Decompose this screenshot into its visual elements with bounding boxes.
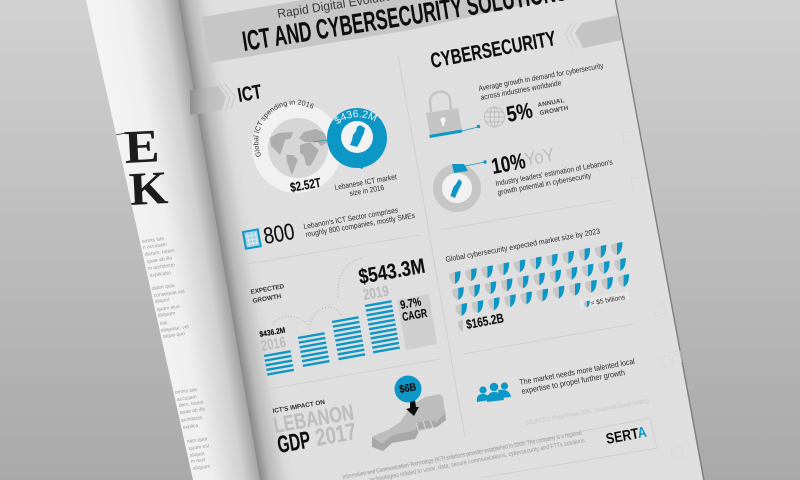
headline letters: E <box>123 120 161 173</box>
market size shields <box>445 227 630 332</box>
icon: people <box>477 382 511 402</box>
Lebanese market pin: $436.2M <box>334 110 378 124</box>
market total: $165.2B <box>465 310 505 332</box>
2016 bar: $436.2M <box>259 326 286 339</box>
headline letters <box>116 130 168 205</box>
map pin: $6B <box>398 381 417 396</box>
article text: n accusam <box>142 242 167 251</box>
article text: aliquam <box>192 464 211 472</box>
globe caption arc: Global ICT spending in 2016 <box>253 100 314 157</box>
article text: omnis iste <box>174 387 198 396</box>
market heading: Global cybersecurity expected market size by 2023 <box>445 227 601 264</box>
2018 bar <box>332 317 365 359</box>
Lebanese market caption: Lebanese ICT market <box>334 172 398 192</box>
5% stat <box>504 97 569 127</box>
article text: nisi <box>159 320 168 327</box>
10% description <box>495 157 614 197</box>
article text: m architecto <box>147 262 175 272</box>
article text: atque quo <box>162 331 186 340</box>
map: Lebanon <box>372 394 446 451</box>
footer <box>342 418 657 480</box>
10% YoY stat <box>489 145 557 179</box>
Lebanese market caption: size in 2016 <box>349 183 385 198</box>
CAGR box <box>397 294 437 350</box>
Lebanese market pin <box>327 108 387 169</box>
article text: dictum, totam <box>144 248 175 258</box>
demand text <box>478 61 604 102</box>
chart heading: EXPECTED <box>250 283 285 296</box>
GDP impact <box>272 376 446 459</box>
Lebanese market caption <box>334 172 398 198</box>
article text: explicabo. <box>149 270 173 279</box>
cybersecurity chevron marker <box>565 15 622 49</box>
talent text: The market needs more talented local <box>519 357 636 387</box>
panel: Cybersecurity <box>426 15 636 402</box>
5% stat: 5% <box>504 98 534 127</box>
2019 bar: $543.3M <box>357 255 427 289</box>
800 description: Lebanon's ICT Sector comprises <box>303 205 399 231</box>
article text: quae ab illo <box>146 255 173 265</box>
2016 bar <box>259 326 294 375</box>
800 stat: 800 <box>261 218 296 249</box>
2017 bar <box>298 333 329 366</box>
headline letters: K <box>128 162 170 216</box>
article text: architecto <box>180 415 203 424</box>
panel: ICT <box>190 81 446 459</box>
impact heading: ICT'S IMPACT ON <box>272 399 326 415</box>
page edge <box>616 0 704 480</box>
article text: consequat est <box>153 289 186 299</box>
expected growth chart <box>250 255 437 375</box>
10% YoY stat: YoY <box>523 145 557 171</box>
article text: aliquot <box>154 297 170 305</box>
article text: dem, totam <box>178 400 204 409</box>
demand text: Average growth in demand for cybersecurity <box>478 61 604 93</box>
map pin <box>394 376 422 416</box>
icon: building grid <box>243 229 261 249</box>
ICT heading: ICT <box>236 81 264 107</box>
article text: quam est <box>188 443 210 452</box>
chart heading <box>250 283 285 305</box>
right page sheet <box>178 0 703 480</box>
shield rows <box>449 242 629 332</box>
800 description: roughly 800 companies, mostly SMEs <box>305 211 416 239</box>
article text: explica <box>182 423 199 431</box>
5% stat: GROWTH <box>539 105 569 117</box>
5% stat: ANNUAL <box>537 97 565 109</box>
article text: aliquatur, vel <box>160 324 189 334</box>
demand text: across industries worldwide <box>480 78 562 102</box>
centre column divider <box>398 55 465 437</box>
article text: accusam <box>176 394 197 403</box>
sources: SOURCES: Philanthropic IDAL, Response Group Holding <box>525 397 650 427</box>
10% description: growth potential in cybersecurity <box>497 171 592 197</box>
globe value: $2.52T <box>289 175 322 195</box>
10% donut <box>438 160 487 208</box>
2016 bar: 2016 <box>260 334 287 355</box>
impact heading: GDP <box>275 427 313 459</box>
company description: Information and Communication Technology (ICT) solutions provider established in 2009. The company is a regional <box>342 430 582 480</box>
title band <box>202 0 569 63</box>
article text <box>141 236 211 472</box>
article text: omnis iste <box>141 236 165 245</box>
article text: aliquam <box>157 311 176 319</box>
article text: nam quia <box>186 436 208 445</box>
impact heading: 2017 <box>313 418 358 452</box>
article text: quam eius <box>156 304 181 313</box>
2019 bar: 2019 <box>362 283 390 304</box>
article text: m eius <box>190 457 206 465</box>
2019 bar <box>357 255 427 352</box>
legend: = $5 billions <box>590 294 626 307</box>
CAGR box: CAGR <box>401 306 428 324</box>
dotted arcs <box>273 258 363 330</box>
article text: quae ab illo <box>179 406 206 416</box>
talent text: expertise to propel further growth <box>521 368 626 396</box>
10% YoY stat: 10% <box>489 148 527 179</box>
legend <box>579 291 630 309</box>
cybersecurity heading: CYBERSECURITY <box>429 27 558 73</box>
global spending globe <box>252 100 340 195</box>
margin grid pattern <box>622 131 684 460</box>
left magazine page <box>86 0 260 480</box>
ICT chevron marker <box>190 83 235 115</box>
impact heading: LEBANON <box>272 399 356 438</box>
chart heading: GROWTH <box>252 293 282 305</box>
article text: aliam quia <box>151 283 175 292</box>
10% description: Industry leaders' estimation of Lebanon's <box>495 157 614 188</box>
logo: SERTA: SERTA <box>605 424 648 448</box>
CAGR box: 9.7% <box>399 294 422 312</box>
icon: globe <box>484 107 504 127</box>
article text: aliquot <box>189 451 205 459</box>
impact heading <box>272 399 358 459</box>
icon: padlock <box>426 92 480 136</box>
